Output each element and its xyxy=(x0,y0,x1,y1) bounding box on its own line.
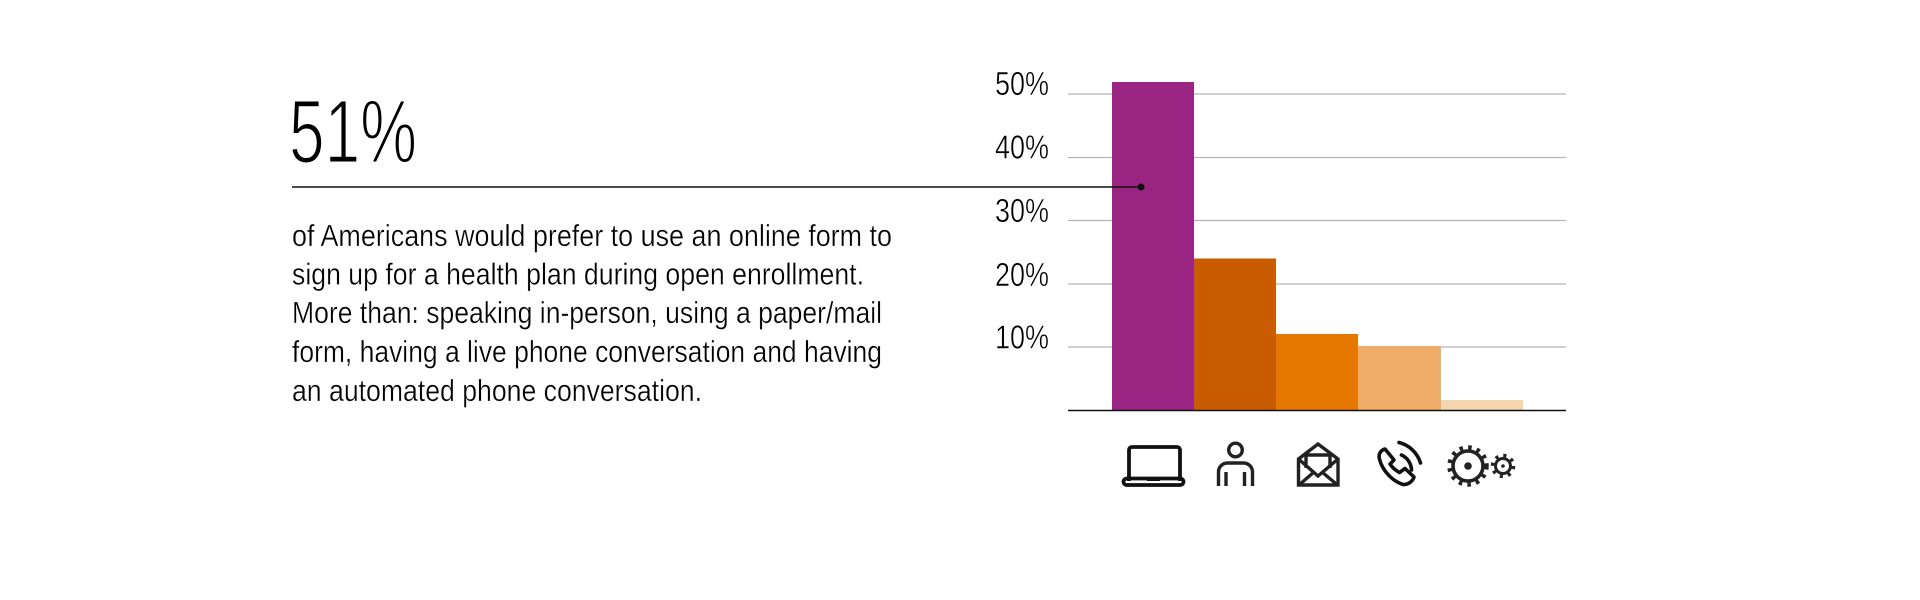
description text xyxy=(292,218,892,408)
bar chart xyxy=(995,65,1566,410)
headline statistic: 51% xyxy=(289,82,417,182)
y axis labels: 40% xyxy=(995,128,1049,166)
icon: gears xyxy=(1450,448,1513,484)
y axis labels: 30% xyxy=(995,192,1049,229)
bar: live phone xyxy=(1358,346,1441,410)
bar: in-person xyxy=(1194,258,1276,410)
chart baseline xyxy=(1068,410,1566,412)
y axis labels: 10% xyxy=(995,318,1049,356)
icon: open envelope xyxy=(1298,444,1338,485)
y axis labels: 20% xyxy=(995,256,1049,293)
description text: More than: speaking in-person, using a paper/mail xyxy=(292,295,882,330)
icon: laptop xyxy=(1124,447,1184,485)
description text: sign up for a health plan during open enrollment. xyxy=(292,256,864,292)
icon: phone xyxy=(1379,442,1420,485)
bar: automated phone xyxy=(1441,400,1523,410)
icon: person xyxy=(1218,443,1252,486)
bar: online form 51% xyxy=(1112,82,1194,410)
bar: paper/mail xyxy=(1276,334,1358,410)
description text: an automated phone conversation. xyxy=(292,373,702,408)
description text: form, having a live phone conversation and having xyxy=(292,334,882,369)
leader line with dot xyxy=(292,184,1144,190)
y axis labels: 50% xyxy=(995,65,1049,102)
description text: of Americans would prefer to use an online form to xyxy=(292,218,892,253)
y axis labels xyxy=(995,65,1049,356)
